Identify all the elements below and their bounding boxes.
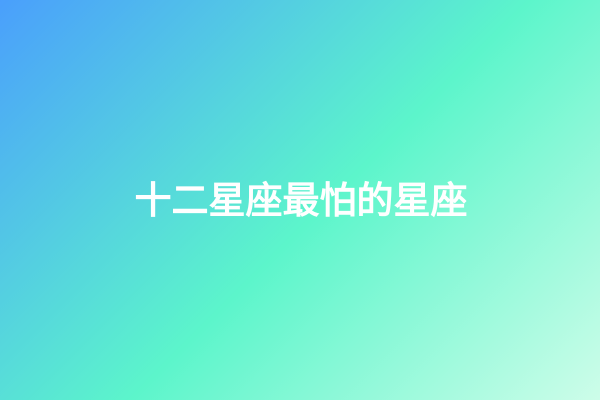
title: 十二星座最怕的星座 xyxy=(134,180,468,221)
